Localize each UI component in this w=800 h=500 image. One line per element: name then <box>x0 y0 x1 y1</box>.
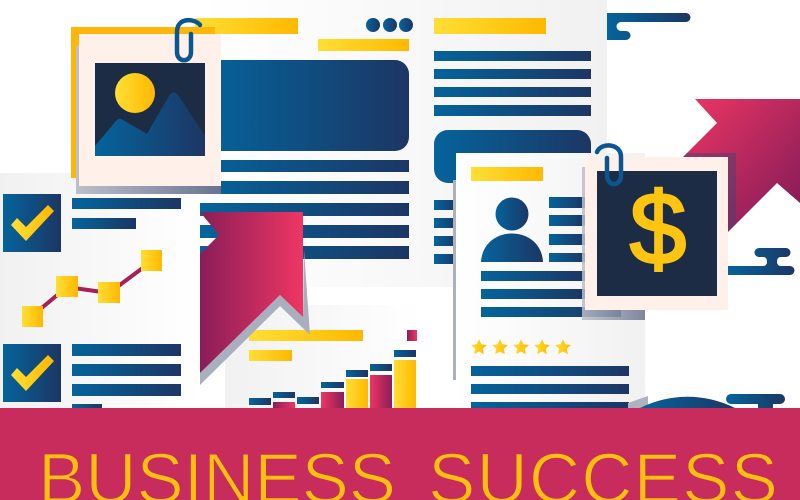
chart heading bars <box>249 330 363 361</box>
text lines: right column <box>434 51 591 116</box>
text lines: below person <box>481 271 621 317</box>
text lines: top item <box>72 198 181 229</box>
decoration: right connector <box>728 248 794 275</box>
rounded block: right column <box>434 130 591 183</box>
heading bar: document left <box>195 18 298 34</box>
icon: person <box>481 198 543 262</box>
decoration: bottom right circle <box>628 394 785 408</box>
arrow: crimson right <box>683 99 800 232</box>
subheading bar <box>318 39 409 51</box>
bar chart <box>249 330 417 408</box>
text lines: right column lower <box>434 200 458 264</box>
line chart <box>22 250 162 327</box>
panel: main document <box>195 0 607 287</box>
decoration: top right tab <box>607 13 690 40</box>
banner <box>0 408 800 500</box>
three dots <box>366 18 413 32</box>
photo card: landscape <box>71 20 221 194</box>
title <box>44 454 774 500</box>
photo card: dollar <box>582 145 728 320</box>
icon: paper clip <box>177 20 200 60</box>
arrow: crimson left <box>200 212 310 385</box>
checkbox: bottom <box>3 344 61 402</box>
profile heading bar <box>471 167 543 181</box>
image: dark square <box>597 171 717 296</box>
checkbox: top <box>3 194 61 252</box>
image: night sky <box>95 63 205 156</box>
panel: profile card <box>453 153 645 408</box>
text lines: left column <box>200 160 409 259</box>
rounded block: main image <box>200 60 409 151</box>
star rating <box>471 339 571 354</box>
panel: bar chart card <box>225 305 420 408</box>
text lines: beside person <box>549 197 585 262</box>
icon: dollar sign: $ <box>630 172 686 286</box>
icon: mountains <box>95 92 205 156</box>
icon: sun <box>115 73 155 113</box>
icon: paper clip <box>597 145 621 184</box>
heading bar: document right <box>434 18 546 34</box>
text lines: reviews <box>471 366 629 408</box>
text lines: bottom item <box>72 344 181 408</box>
panel: left checklist <box>0 173 200 408</box>
